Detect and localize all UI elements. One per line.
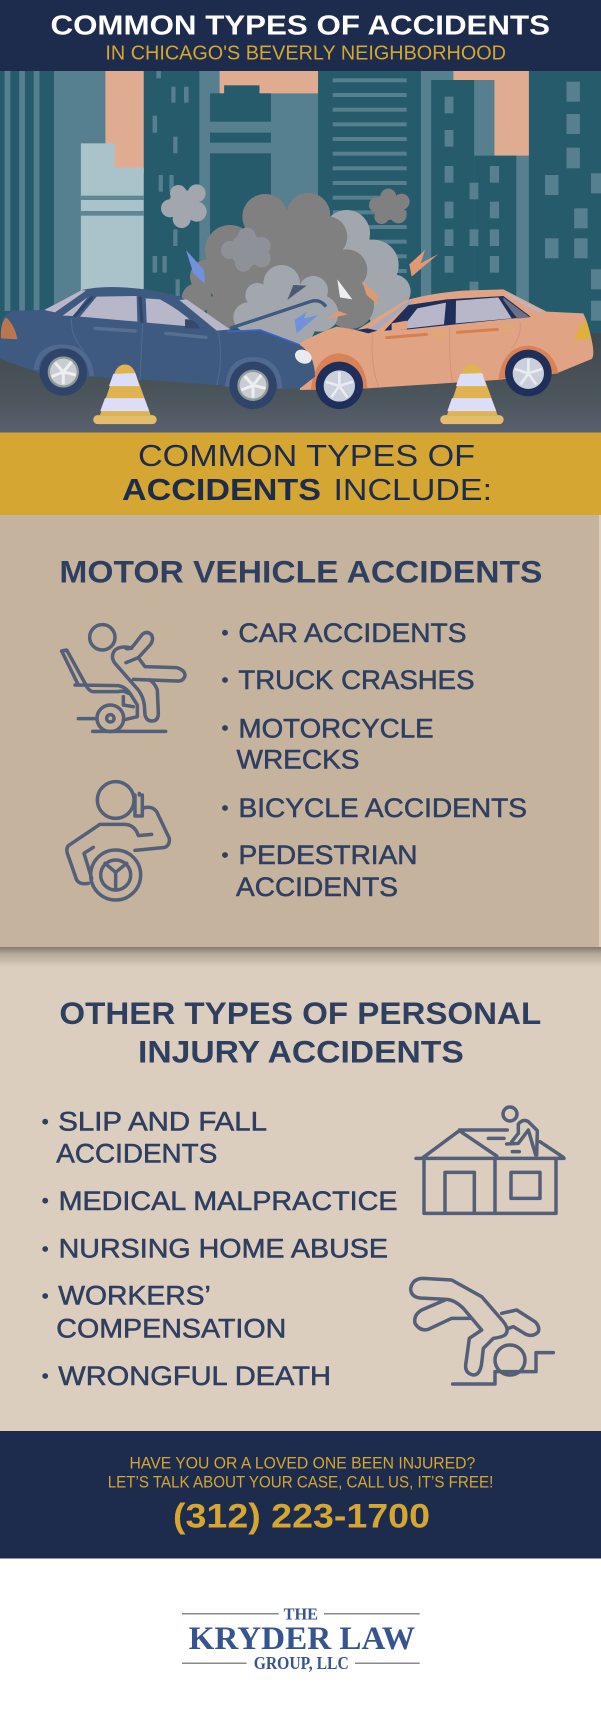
list: other accident types: MEDICAL MALPRACTICE (59, 1186, 397, 1216)
list: other accident types (42, 1107, 398, 1391)
main title: COMMON TYPES OF ACCIDENTS (50, 9, 550, 40)
road (0, 333, 601, 433)
heading: other types line 2: INJURY ACCIDENTS (138, 1034, 464, 1070)
heading: other types line 1: OTHER TYPES OF PERSONAL (59, 995, 541, 1031)
traffic cone left (93, 364, 157, 424)
flying debris (186, 250, 438, 333)
list: other accident types: COMPENSATION (56, 1313, 286, 1343)
heading: motor vehicle accidents: MOTOR VEHICLE ACCIDENTS (59, 554, 542, 590)
gold banner (0, 432, 601, 515)
call to action line 1: HAVE YOU OR A LOVED ONE BEEN INJURED? (130, 1455, 475, 1473)
traffic cone right (440, 364, 504, 424)
list: motor vehicle accident types: MOTORCYCLE (238, 713, 434, 743)
call to action footer (0, 1431, 601, 1558)
list: other accident types: SLIP AND FALL (58, 1107, 267, 1137)
city skyline (0, 71, 601, 434)
logo: the kryder law group: GROUP, LLC (254, 1653, 349, 1673)
logo: the kryder law group: THE (284, 1604, 318, 1623)
panel: other types of personal injury accidents (0, 515, 601, 1431)
icon: worker falling from roof (416, 1107, 564, 1213)
banner heading line 1: COMMON TYPES OF (138, 439, 475, 473)
list: motor vehicle accident types: ACCIDENTS (236, 872, 398, 902)
banner heading line 2 bold: ACCIDENTS (122, 473, 321, 507)
call to action line 2: LET’S TALK ABOUT YOUR CASE, CALL US, IT’S FREE! (108, 1473, 493, 1491)
list: motor vehicle accident types: WRECKS (236, 745, 360, 775)
list: motor vehicle accident types: CAR ACCIDENTS (238, 618, 466, 648)
icon: driver on phone at steering wheel (67, 782, 169, 900)
panel: motor vehicle accidents (0, 515, 599, 947)
logo: the kryder law group (182, 1604, 420, 1673)
orange car (297, 289, 593, 409)
blue car (0, 287, 326, 409)
list: motor vehicle accident types (222, 618, 527, 902)
list: other accident types: ACCIDENTS (56, 1138, 217, 1168)
icon: driver thrown from car seat (62, 625, 185, 732)
list: motor vehicle accident types: TRUCK CRASHES (238, 665, 474, 695)
list: motor vehicle accident types: BICYCLE ACCIDENTS (238, 793, 527, 823)
list: other accident types: NURSING HOME ABUSE (59, 1234, 388, 1264)
banner heading line 2 regular: INCLUDE: (334, 473, 492, 507)
smoke cloud (161, 184, 438, 353)
logo: the kryder law group: KRYDER LAW (189, 1621, 415, 1657)
icon: person falling down stairs (411, 1278, 553, 1384)
list: motor vehicle accident types: PEDESTRIAN (238, 840, 418, 870)
illustration: car crash in the city (0, 71, 601, 434)
list: other accident types: WORKERS’ (58, 1280, 211, 1310)
header banner (0, 0, 601, 71)
subtitle: IN CHICAGO'S BEVERLY NEIGHBORHOOD (105, 42, 506, 64)
list: other accident types: WRONGFUL DEATH (58, 1361, 331, 1391)
phone number: (312) 223-1700 (173, 1498, 430, 1536)
